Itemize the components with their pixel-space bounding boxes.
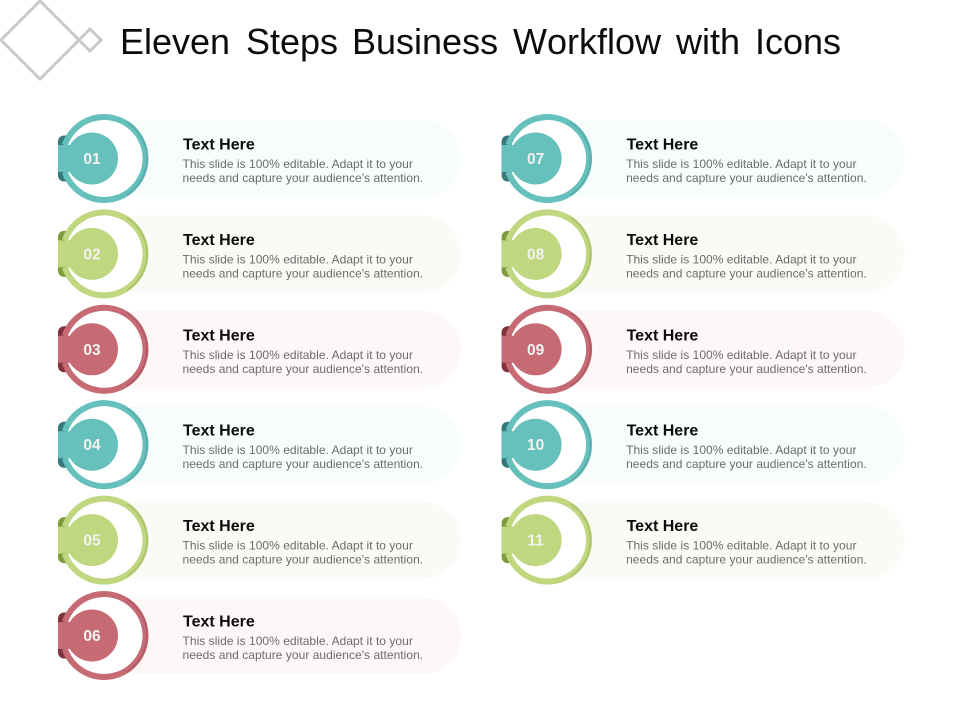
step 10: needs and capture your audience's attention. <box>626 457 867 471</box>
step 07: 07 <box>527 151 544 168</box>
step 10 <box>502 403 905 486</box>
step 04: This slide is 100% editable. Adapt it to your <box>182 443 413 457</box>
step 06: needs and capture your audience's attention. <box>182 648 423 662</box>
step 03: Text Here <box>183 327 255 344</box>
step 09 <box>502 308 905 391</box>
icon: decorative diamonds <box>1 1 101 79</box>
step 07: This slide is 100% editable. Adapt it to your <box>626 157 856 171</box>
title: with <box>675 21 740 62</box>
step 01: Text Here <box>183 136 255 154</box>
title: Business <box>352 21 498 62</box>
step 04 <box>58 403 461 486</box>
step 09: needs and capture your audience's attention. <box>626 362 867 376</box>
step 03: 03 <box>83 342 101 359</box>
step 02: Text Here <box>183 232 255 249</box>
step 04: needs and capture your audience's attention. <box>182 457 423 471</box>
step 10: 10 <box>527 437 544 454</box>
step 01 <box>58 117 461 200</box>
step 11: needs and capture your audience's attention. <box>626 553 867 567</box>
title: Steps <box>246 21 338 62</box>
step 06: Text Here <box>183 614 255 630</box>
step 02: needs and capture your audience's attention. <box>182 266 423 280</box>
step 02: This slide is 100% editable. Adapt it to your <box>182 252 413 266</box>
title: Eleven <box>120 21 230 62</box>
step 04: 04 <box>83 437 101 454</box>
step 08: 08 <box>527 246 545 263</box>
title: Workflow <box>513 21 662 62</box>
step 07: needs and capture your audience's attention. <box>626 171 867 185</box>
step 08 <box>502 212 905 295</box>
step 07 <box>502 117 905 200</box>
step 08: Text Here <box>627 232 698 249</box>
step 10: Text Here <box>627 423 698 440</box>
step 03: This slide is 100% editable. Adapt it to your <box>182 348 413 362</box>
step 06 <box>58 594 461 677</box>
step 09: Text Here <box>627 327 698 344</box>
step 05 <box>58 499 461 582</box>
step 01: needs and capture your audience's attention. <box>182 171 423 185</box>
step 04: Text Here <box>183 423 255 440</box>
step 09: 09 <box>527 342 545 359</box>
step 11: Text Here <box>627 518 698 535</box>
step 03 <box>58 308 461 391</box>
step 01: 01 <box>83 151 101 168</box>
step 08: needs and capture your audience's attention. <box>626 266 867 280</box>
step 11 <box>502 499 905 582</box>
step 07: Text Here <box>627 136 698 154</box>
step 09: This slide is 100% editable. Adapt it to your <box>626 348 856 362</box>
step 06: 06 <box>83 628 101 645</box>
step 11: 11 <box>527 533 544 550</box>
title: Icons <box>755 21 841 62</box>
step 10: This slide is 100% editable. Adapt it to your <box>626 443 856 457</box>
step 05: needs and capture your audience's attention. <box>182 553 423 567</box>
step 01: This slide is 100% editable. Adapt it to your <box>182 157 413 171</box>
step 02 <box>58 212 461 295</box>
step 02: 02 <box>83 246 101 263</box>
step 03: needs and capture your audience's attention. <box>182 362 423 376</box>
step 11: This slide is 100% editable. Adapt it to your <box>626 539 856 553</box>
step 08: This slide is 100% editable. Adapt it to your <box>626 252 856 266</box>
step 05: This slide is 100% editable. Adapt it to your <box>182 539 413 553</box>
step 05: 05 <box>83 533 101 550</box>
step 06: This slide is 100% editable. Adapt it to your <box>182 634 413 648</box>
step 05: Text Here <box>183 518 255 535</box>
